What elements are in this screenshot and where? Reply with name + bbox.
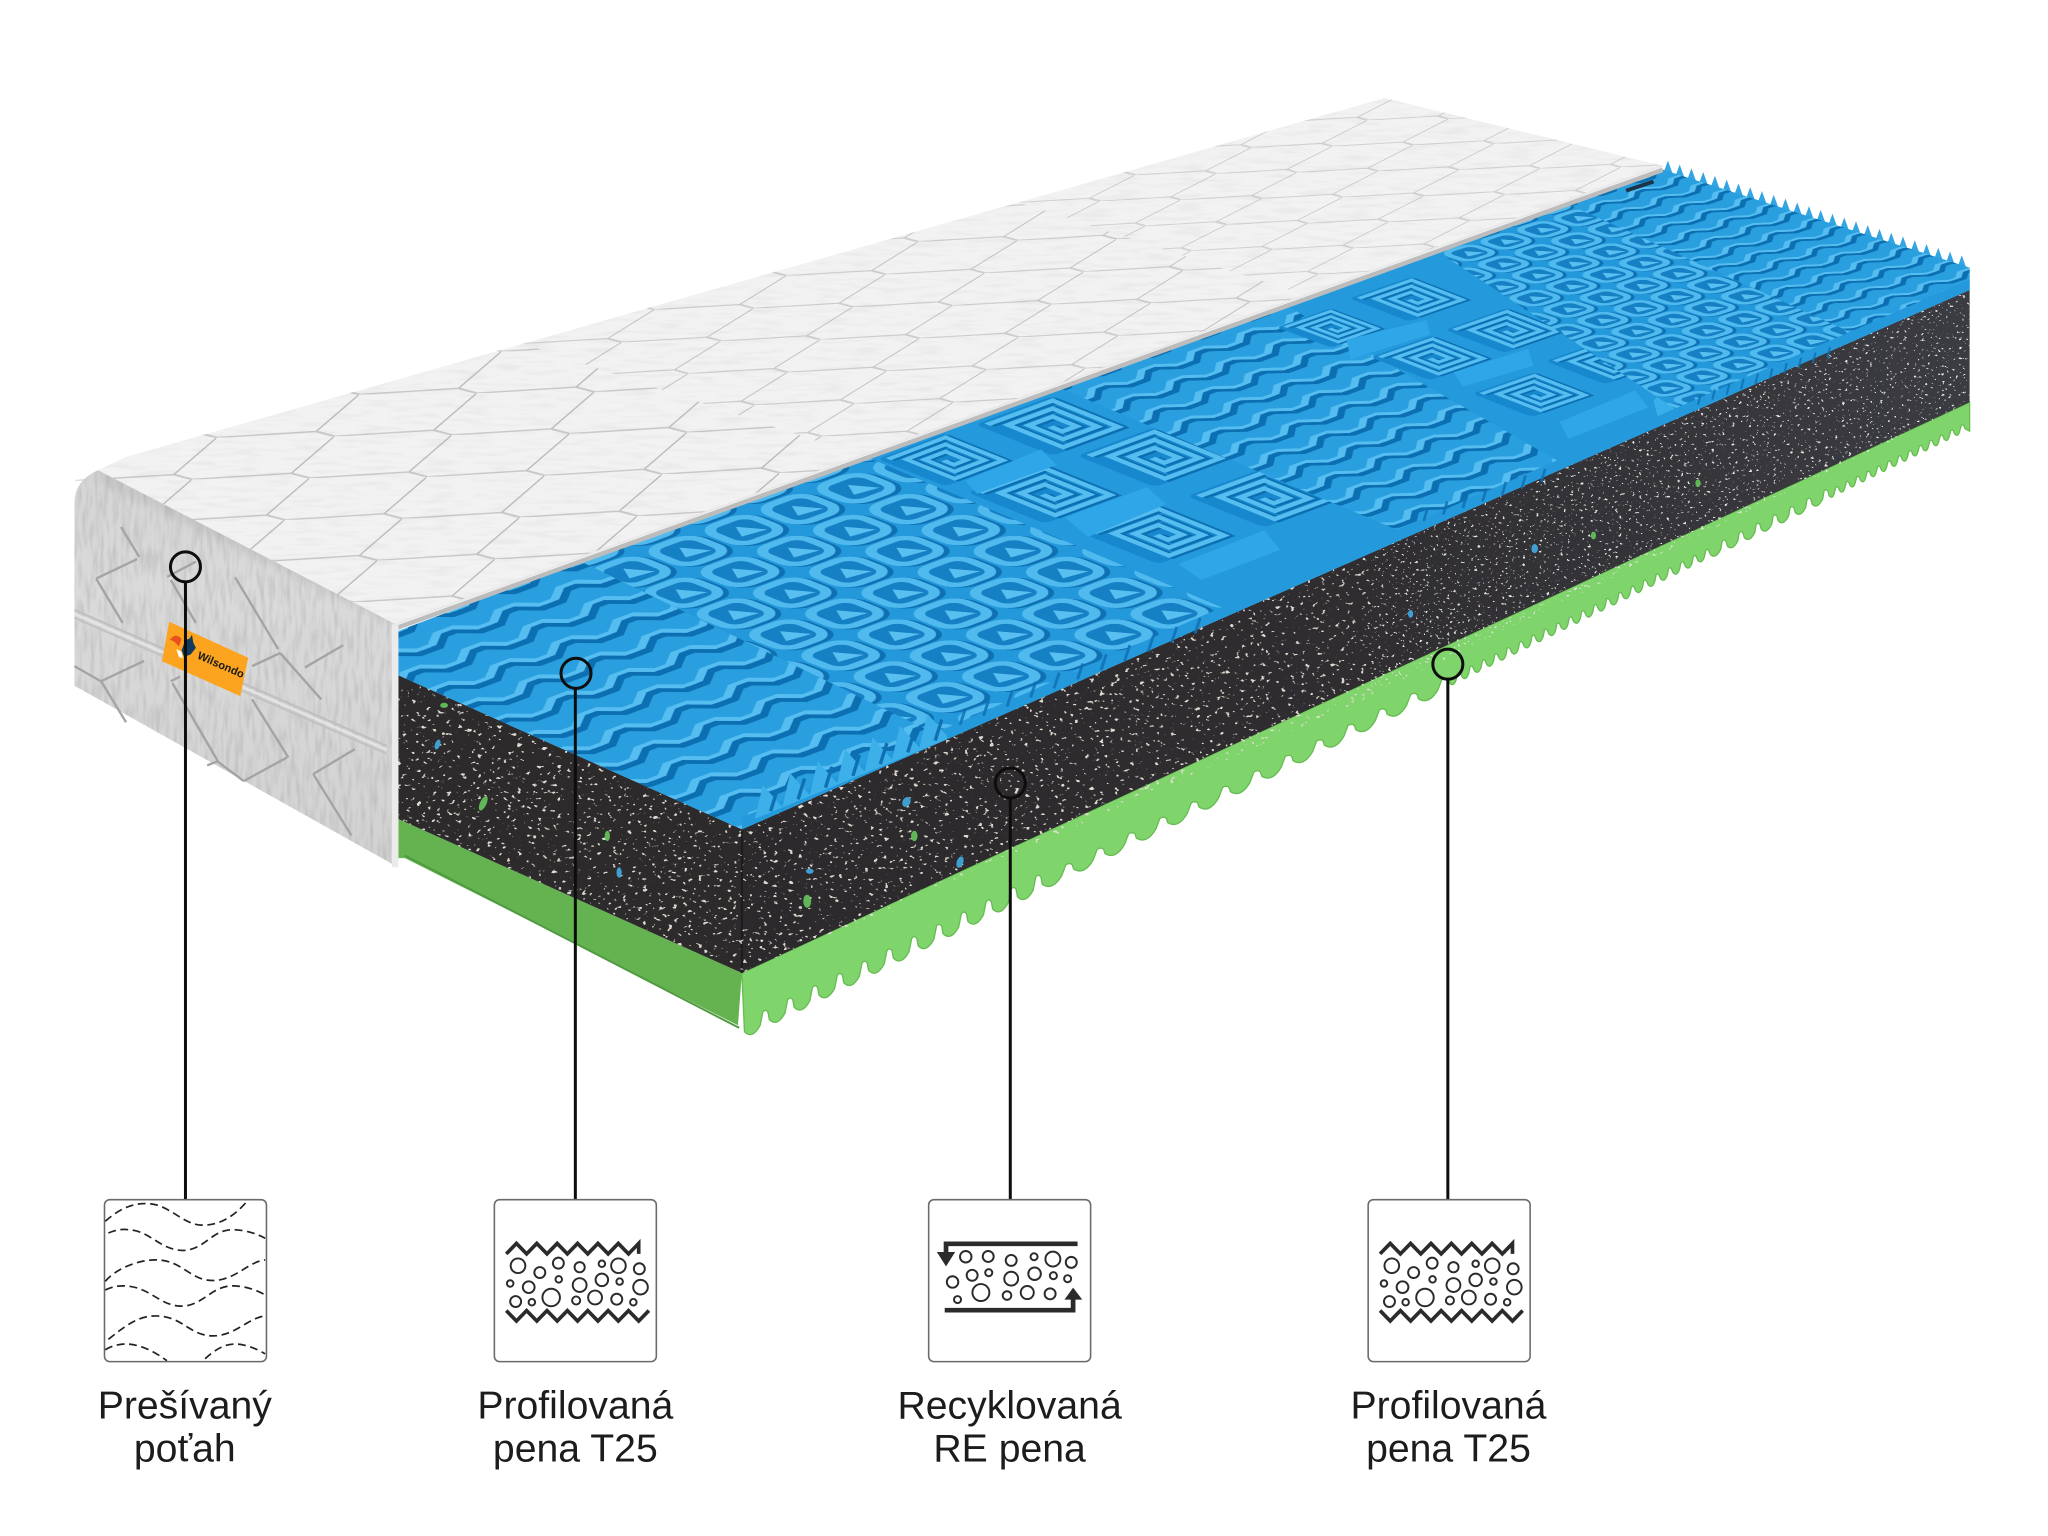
cover cut edge (395, 166, 1663, 867)
label: Prešívaný poťah: poťah (134, 1428, 236, 1471)
logo mark (170, 635, 196, 658)
layer: blue profiled foam (398, 161, 1970, 829)
wave zone 1 (398, 562, 947, 829)
icon: profiled foam (494, 1200, 656, 1362)
label: Profilovaná pena T25: pena T25 (1366, 1428, 1531, 1471)
label: Prešívaný poťah: Prešívaný (98, 1384, 272, 1427)
small squares zone 1 (581, 457, 1234, 739)
label: Recyklovaná RE pena: RE pena (933, 1428, 1086, 1471)
callout: quilted cover (170, 552, 200, 1199)
panel: Recyklovaná RE pena (897, 1200, 1122, 1471)
blue front edge facets (742, 280, 1970, 829)
mattress cover (65, 91, 1672, 875)
callout: profiled foam top (561, 658, 591, 1199)
label: Profilovaná pena T25: Profilovaná (477, 1384, 674, 1427)
cover front side (65, 464, 405, 875)
label: Profilovaná pena T25: pena T25 (493, 1428, 658, 1471)
blue edge teeth (1663, 161, 1970, 290)
layer: green profiled foam (398, 402, 1970, 1035)
zipper seam (74, 610, 387, 754)
callout: recycled foam (995, 768, 1025, 1199)
layer: dark recycled RE foam (392, 281, 1979, 980)
quilting lines (74, 527, 355, 835)
spiral zone 1 (867, 388, 1411, 613)
wave zone 2 (1059, 306, 1567, 536)
wave zone 3 (1567, 170, 1970, 337)
callout: profiled foam bottom (1433, 649, 1463, 1199)
icon: quilted stitches (104, 1200, 266, 1362)
icon: profiled foam (1368, 1200, 1530, 1362)
label: Profilovaná pena T25: Profilovaná (1350, 1384, 1547, 1427)
panel: Profilovaná pena T25 (top) (477, 1200, 674, 1471)
panel: Prešívaný poťah (98, 1200, 272, 1471)
brand label: Wilsondo: Wilsondo (195, 650, 246, 681)
brand label: Wilsondo (162, 622, 248, 696)
cover top surface (65, 91, 1672, 633)
label: Recyklovaná RE pena: Recyklovaná (897, 1384, 1122, 1427)
panel: Profilovaná pena T25 (bottom) (1350, 1200, 1547, 1471)
icon: recycled foam (929, 1200, 1091, 1362)
mattress illustration (65, 91, 1979, 1035)
spiral zone 2 (1277, 251, 1737, 466)
small squares zone 2 (1437, 204, 1861, 415)
